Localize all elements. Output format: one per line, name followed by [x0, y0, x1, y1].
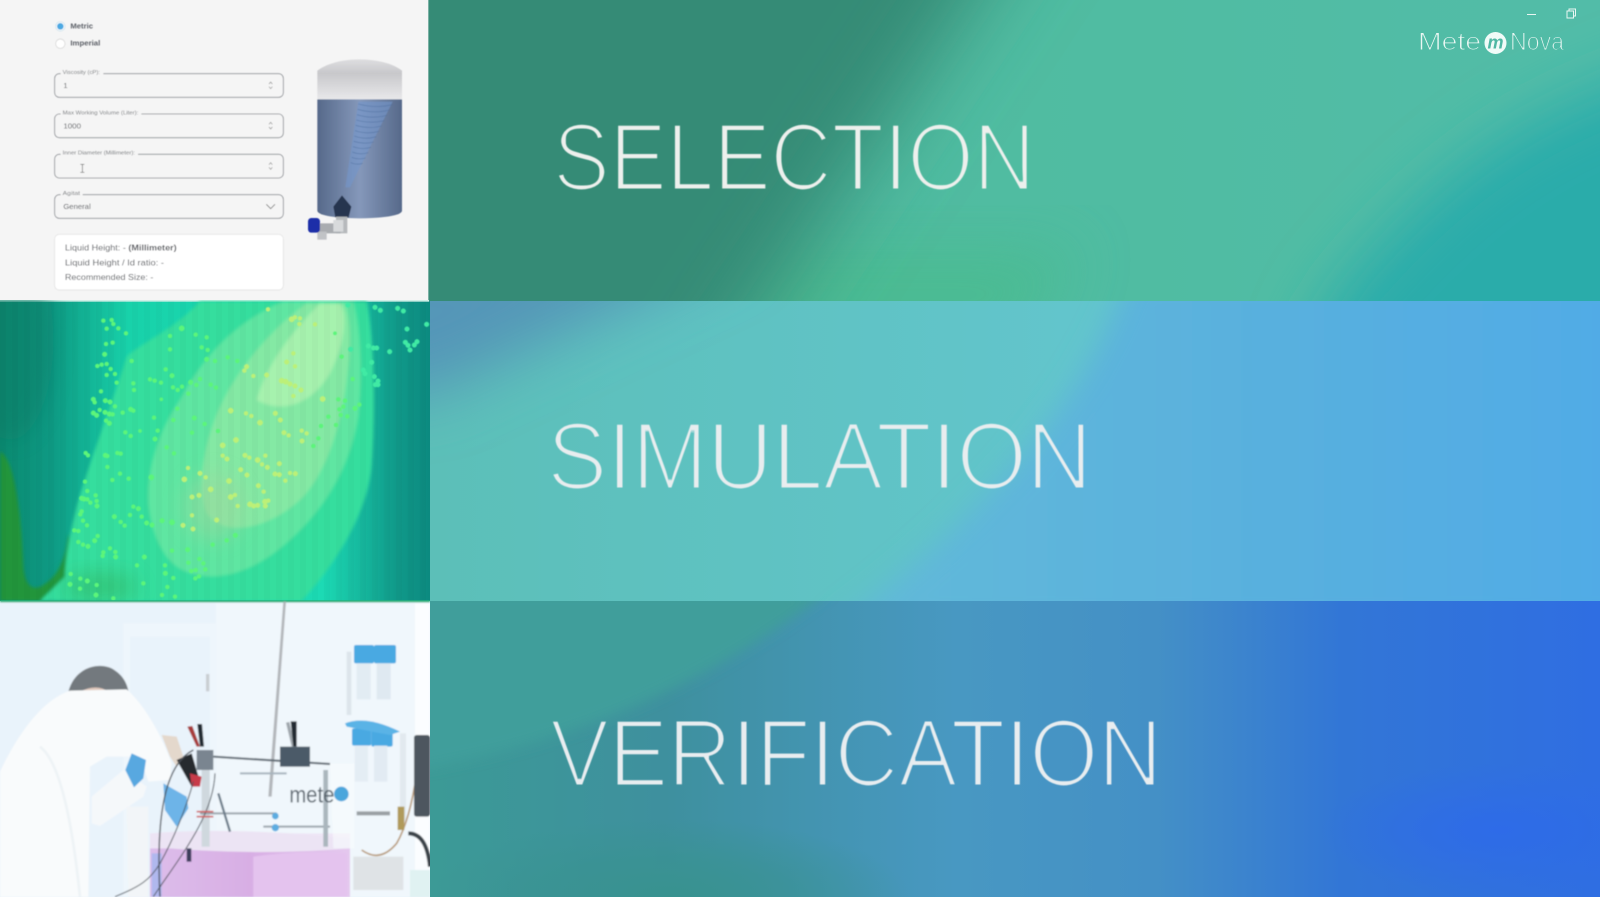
field: inner diameter: Inner Diameter (Millimeter): — [63, 151, 135, 157]
logo: MeteNova — [1418, 28, 1564, 56]
radio: imperial: Imperial — [70, 39, 100, 48]
person in lab coat — [0, 666, 188, 897]
results box: Recommended Size: - — [65, 272, 154, 282]
field: agitator: General — [63, 202, 91, 211]
window controls — [1527, 9, 1576, 18]
field: max working volume: 1000 — [63, 122, 81, 131]
field: agitator: Agitat — [63, 191, 81, 197]
results box — [55, 234, 283, 290]
vessel logo: mete — [289, 782, 334, 808]
field: viscosity — [55, 69, 283, 97]
tank illustration — [308, 59, 402, 240]
vessel logo — [290, 786, 350, 804]
radio: imperial — [56, 39, 100, 48]
particles — [68, 303, 429, 600]
field: inner diameter — [55, 150, 283, 178]
logo: MeteNova: Mete — [1418, 28, 1481, 56]
results box: Liquid Height / Id ratio: - — [65, 257, 164, 267]
panel: simulation banner — [429, 301, 1600, 601]
results box: Liquid Height: - (Millimeter) — [65, 243, 177, 253]
heading: verification: VERIFICATION — [550, 700, 1162, 807]
field: max working volume — [55, 110, 283, 138]
wall and cabinets — [206, 600, 430, 870]
radio: metric — [56, 22, 93, 31]
panel: verification banner — [380, 590, 1600, 897]
field: viscosity: Viscosity (cP): — [63, 70, 100, 76]
contour: outer band — [40, 301, 374, 601]
field: viscosity: 1 — [63, 81, 68, 90]
heading: selection: SELECTION — [553, 104, 1035, 211]
water filters on wall — [345, 645, 430, 897]
contour: inner band — [202, 303, 350, 528]
field: agitator — [55, 190, 283, 218]
contour: lower-left green region — [0, 451, 70, 600]
heading: simulation: SIMULATION — [547, 403, 1092, 510]
panel: laboratory photo — [0, 600, 430, 897]
field: max working volume: Max Working Volume (Liter): — [63, 110, 138, 116]
contour: hot spot — [257, 303, 344, 406]
clamps and rig — [115, 721, 330, 897]
panel: selection form screenshot — [0, 0, 429, 302]
logo: MeteNova: m — [1487, 32, 1504, 52]
radio: metric: Metric — [70, 22, 93, 31]
contour: middle band — [148, 301, 361, 576]
logo: MeteNova: Nova — [1510, 28, 1564, 56]
panel: simulation contour plot — [0, 300, 430, 601]
panel: selection banner — [429, 0, 1600, 301]
vessel and purple liquid — [150, 763, 354, 897]
